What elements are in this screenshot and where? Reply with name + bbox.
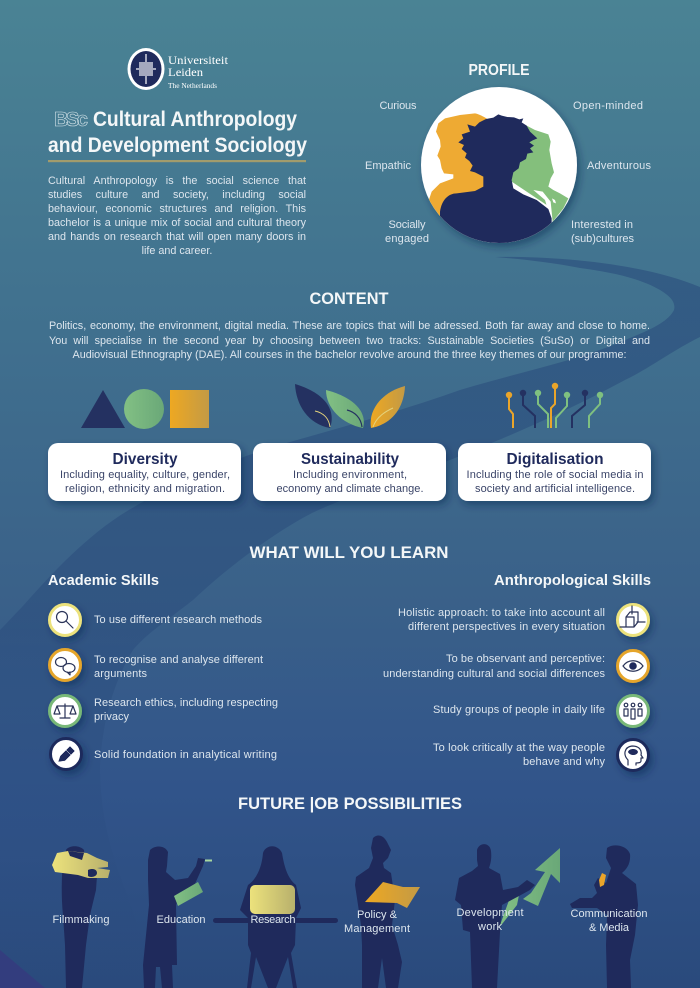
job labels: Development	[456, 907, 524, 919]
icon: head with brain	[618, 740, 648, 770]
card: Sustainability: Sustainability	[301, 451, 399, 468]
logo wordmark: Leiden	[168, 67, 203, 79]
anthropological skills text: understanding cultural and social differences	[383, 668, 606, 680]
orange silhouette	[428, 113, 487, 218]
person: filmmaker	[52, 846, 110, 988]
job labels: Research	[250, 914, 296, 926]
anthropological skills text: different perspectives in every situation	[408, 621, 605, 633]
card: Digitalisation: Including the role of social media in	[466, 469, 644, 481]
card: Diversity: Including equality, culture, gender,	[60, 469, 230, 481]
profile labels: Socially	[388, 219, 426, 231]
card: Diversity	[48, 443, 241, 501]
intro text: behaviour, economic structures and religion. This	[48, 203, 306, 215]
title underline	[48, 160, 306, 162]
academic skills heading: Academic Skills	[48, 572, 159, 589]
profile section	[365, 62, 652, 245]
academic skills text: To use different research methods	[94, 614, 262, 626]
content text	[49, 320, 650, 361]
profile labels: Open-minded	[573, 100, 643, 112]
person: development worker	[455, 844, 560, 988]
icon: speech bubbles	[50, 650, 80, 680]
person: researcher at laptop	[213, 846, 338, 988]
icon: eye	[618, 650, 648, 682]
job labels: Education	[156, 914, 206, 926]
camera details	[68, 851, 97, 877]
intro text: bachelor is a unique mix of social and cultural theory	[48, 217, 306, 229]
job labels: Management	[344, 923, 410, 935]
green silhouette	[510, 126, 568, 222]
camera	[52, 851, 110, 878]
icon: scales	[50, 696, 80, 726]
logo: Universiteit Leiden	[128, 48, 229, 90]
profile labels	[365, 100, 652, 245]
open folder	[365, 882, 420, 908]
card: Digitalisation: Digitalisation	[506, 451, 604, 468]
intro text: Cultural Anthropology is the social science that	[48, 175, 306, 187]
academic skills text: privacy	[94, 711, 130, 723]
collar	[533, 190, 556, 222]
job labels: Communication	[570, 908, 648, 920]
academic skills text: arguments	[94, 668, 148, 680]
title line 2: and Development Sociology	[48, 134, 307, 157]
icon: sustainability leaves	[295, 384, 405, 428]
logo wordmark	[168, 55, 229, 90]
person: speaker	[570, 845, 638, 988]
pen	[205, 860, 212, 862]
intro text	[48, 175, 306, 257]
learn heading: WHAT WILL YOU LEARN	[250, 544, 448, 562]
job labels	[52, 907, 648, 935]
anthropological skills text: To look critically at the way people	[433, 742, 605, 754]
profile labels: Empathic	[365, 160, 412, 172]
icon: magnifier	[50, 604, 80, 636]
anthropological skills text: behave and why	[523, 756, 606, 768]
academic skills text	[94, 614, 278, 761]
logo wordmark: Universiteit	[168, 55, 229, 67]
table	[213, 918, 338, 923]
job labels: Filmmaking	[52, 914, 110, 926]
card: Sustainability: economy and climate change.	[276, 483, 424, 495]
anthropological skills heading: Anthropological Skills	[494, 572, 651, 589]
icon: diversity shapes	[81, 389, 209, 429]
card: Diversity: religion, ethnicity and migration.	[65, 483, 225, 495]
profile labels: engaged	[385, 233, 429, 245]
card: Sustainability	[253, 443, 446, 501]
card: Digitalisation	[458, 443, 651, 501]
intro text: life and career.	[142, 245, 212, 257]
card: Sustainability: Including environment,	[293, 469, 407, 481]
person: policy maker	[355, 835, 420, 988]
profile labels: Adventurous	[587, 160, 652, 172]
job labels: & Media	[589, 922, 630, 934]
figure	[455, 844, 535, 988]
profile heading: PROFILE	[468, 62, 530, 79]
laptop	[250, 885, 295, 914]
job labels: work	[477, 921, 502, 933]
icon: digitalisation circuit	[506, 383, 603, 428]
title	[48, 108, 307, 157]
content heading: CONTENT	[310, 290, 388, 308]
icon: group of people	[618, 696, 648, 726]
logo seal	[128, 48, 164, 90]
job labels: Policy &	[357, 909, 398, 921]
intro text: and hands on research that will open many doors in	[48, 231, 306, 243]
profile labels: (sub)cultures	[571, 233, 634, 245]
profile labels: Curious	[380, 100, 417, 112]
logo wordmark: The Netherlands	[168, 82, 217, 90]
person: teacher	[143, 846, 212, 988]
anthropological skills text: Holistic approach: to take into account all	[398, 607, 605, 619]
future job heading: FUTURE |OB POSSIBILITIES	[238, 794, 462, 813]
content text: Audiovisual Ethnography (DAE). All courses in the bachelor revolve around the three key themes of our programme:	[73, 349, 626, 361]
profile circle with silhouettes	[421, 87, 577, 245]
microphone	[599, 873, 606, 887]
academic skills text: Solid foundation in analytical writing	[94, 749, 277, 761]
BSc outlined label: BSc	[54, 109, 88, 131]
anthropological skills text: Study groups of people in daily life	[433, 704, 605, 716]
anthropological skills text: To be observant and perceptive:	[446, 653, 605, 665]
decorative swoosh road	[0, 257, 700, 988]
academic skills text: To recognise and analyse different	[94, 654, 263, 666]
icon: pencil	[50, 738, 82, 770]
growth arrow	[499, 848, 560, 928]
book	[174, 882, 203, 906]
card: Digitalisation: society and artificial intelligence.	[475, 483, 635, 495]
content text: You will specialise in the second year by choosing between two tracks: Sustainable Societies (SuSo) or Digital and	[49, 334, 650, 346]
academic skills text: Research ethics, including respecting	[94, 697, 278, 709]
card: Diversity: Diversity	[112, 451, 178, 468]
profile labels: Interested in	[571, 219, 633, 231]
intro text: studies culture and society, including social	[48, 189, 306, 201]
anthropological skills text	[383, 607, 606, 768]
icon: cube with arrows	[618, 604, 648, 636]
title line 1: Cultural Anthropology	[93, 108, 297, 131]
navy silhouette	[440, 114, 552, 245]
corner accent	[0, 950, 45, 988]
content text: Politics, economy, the environment, digital media. These are topics that will be adressed. Both far away and close to home.	[49, 320, 650, 332]
